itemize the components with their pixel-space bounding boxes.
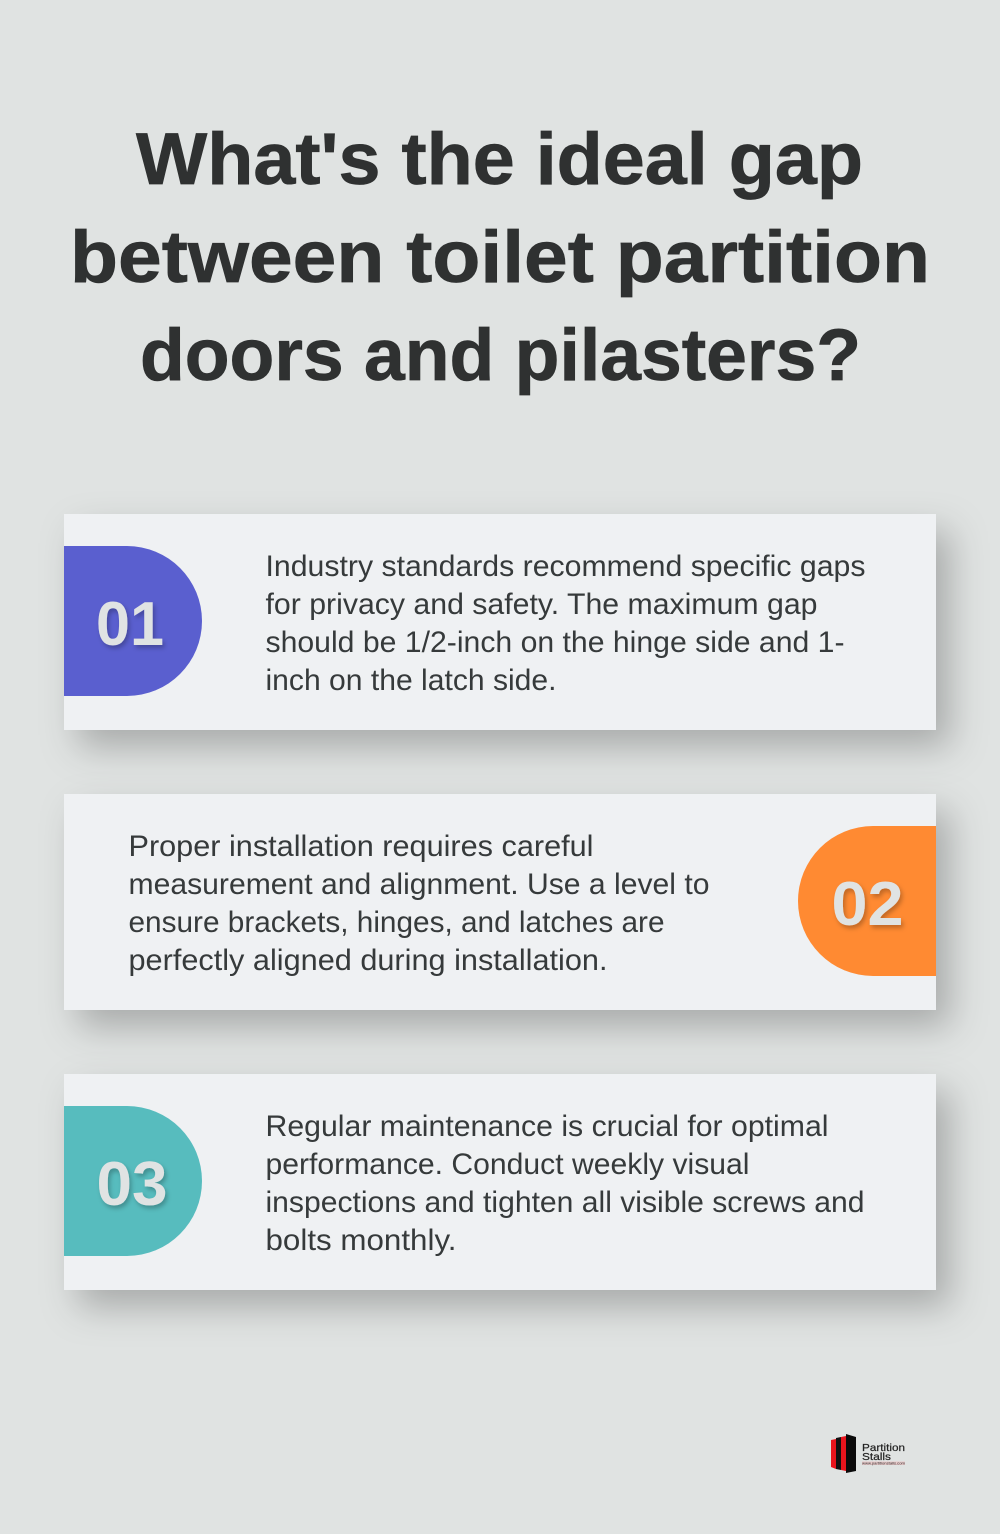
card background 03 — [64, 1074, 936, 1290]
text block 03 — [266, 1110, 865, 1257]
title — [70, 119, 930, 396]
title: between toilet partition — [70, 217, 930, 298]
badge 02 — [798, 826, 936, 976]
text block 01: Industry standards recommend specific gaps — [266, 550, 866, 583]
text block 01: inch on the latch side. — [266, 664, 556, 697]
text block 02: measurement and alignment. Use a level to — [128, 868, 710, 901]
icon: partition stalls — [831, 1434, 856, 1473]
text block 02 — [128, 830, 710, 977]
text block 03: Regular maintenance is crucial for optimal — [266, 1110, 828, 1143]
text block 01: should be 1/2-inch on the hinge side and 1- — [266, 626, 844, 659]
panel: step 02 — [64, 794, 936, 1010]
number 01: 01 — [96, 590, 164, 659]
badge 01 — [64, 546, 202, 696]
card background 02 — [64, 794, 936, 1010]
text block 03: inspections and tighten all visible screws and — [266, 1186, 865, 1219]
logo wordmark: Partition — [862, 1442, 905, 1454]
logo: Partition Stalls: Stalls — [862, 1451, 891, 1463]
text block 03: performance. Conduct weekly visual — [266, 1148, 750, 1181]
text block 01 — [266, 550, 866, 697]
text block 02: ensure brackets, hinges, and latches are — [128, 906, 664, 939]
text block 02: Proper installation requires careful — [128, 830, 594, 863]
logo: Partition Stalls — [831, 1434, 905, 1473]
panel: step 03 — [64, 1074, 936, 1290]
badge 03 — [64, 1106, 202, 1256]
number 02: 02 — [832, 870, 904, 939]
logo tagline: www.partitionstalls.com — [862, 1462, 905, 1466]
title: What's the ideal gap — [136, 119, 863, 200]
text block 03: bolts monthly. — [266, 1224, 456, 1257]
number 03: 03 — [96, 1150, 168, 1219]
panel: step 01 — [64, 514, 936, 730]
text block 02: perfectly aligned during installation. — [128, 944, 608, 977]
text block 01: for privacy and safety. The maximum gap — [266, 588, 818, 621]
title: doors and pilasters? — [140, 315, 861, 396]
card background 01 — [64, 514, 936, 730]
